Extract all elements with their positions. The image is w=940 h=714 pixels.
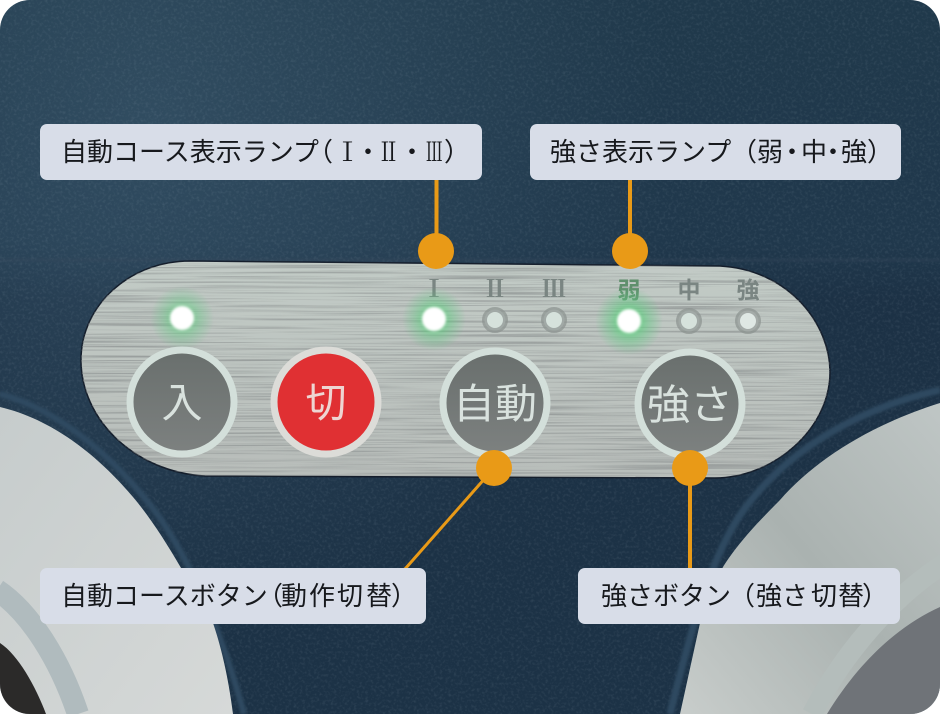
leader: course lamp <box>418 180 454 269</box>
strength lamp labels: 弱 <box>618 271 640 305</box>
strength lamp labels: 中 <box>678 271 700 305</box>
button: 切 <box>274 350 378 454</box>
strength lamp labels: 強 <box>736 271 760 305</box>
label: course button: 動作切替 <box>281 576 392 613</box>
lamp 弱 (lit) <box>598 290 660 352</box>
leader: strength button <box>672 450 708 568</box>
label: strength button: 強さ切替 <box>756 576 864 613</box>
course lamp labels: Ⅱ <box>483 277 507 303</box>
right cushion inner recess <box>827 607 940 714</box>
label: strength lamp: 強さ表示ランプ <box>550 132 731 169</box>
left cushion <box>0 394 244 714</box>
button: 強さ: 強さ <box>647 371 733 431</box>
lamp 強 (off) <box>738 310 758 332</box>
left cushion dark recess <box>0 643 46 714</box>
label: strength lamp: ・ <box>820 132 846 169</box>
label: strength lamp: 弱 <box>757 132 783 169</box>
leader: strength lamp <box>612 180 648 269</box>
right cushion <box>670 390 940 714</box>
button: 強さ <box>638 352 742 456</box>
leader: course button <box>405 450 512 569</box>
left cushion piping <box>0 590 78 714</box>
label: strength lamp <box>530 124 901 180</box>
button: 入: 入 <box>162 369 202 429</box>
button: 自動: 自動 <box>453 370 537 430</box>
label: strength lamp: 強 <box>841 132 867 169</box>
label: course lamp: ・ <box>399 132 425 169</box>
label: strength button <box>578 568 900 624</box>
course lamp labels: Ⅲ <box>542 277 566 303</box>
lamp III (off) <box>544 310 564 330</box>
strength lamp labels <box>618 278 759 300</box>
label: course lamp: Ⅲ <box>426 138 443 167</box>
course lamp labels <box>429 279 566 297</box>
label: strength lamp: ） <box>867 132 893 169</box>
label: course button: ） <box>391 576 417 613</box>
label: course lamp: ・ <box>355 132 381 169</box>
metal control plate <box>78 258 834 480</box>
label: strength button: 強さボタン <box>601 576 731 613</box>
label: course button <box>40 568 426 624</box>
course lamp labels: Ⅰ <box>422 277 446 303</box>
label: course lamp: ） <box>444 132 470 169</box>
label: course lamp <box>40 124 482 180</box>
label: strength lamp: ・ <box>779 132 805 169</box>
lamp I (lit) <box>405 290 463 348</box>
label: strength lamp: 中 <box>801 132 827 169</box>
label: strength lamp: （ <box>731 132 757 169</box>
label: course lamp: Ⅰ <box>334 138 361 167</box>
lamp II (off) <box>484 310 506 330</box>
button: 切: 切 <box>306 369 346 429</box>
right cushion piping <box>850 624 888 654</box>
label: strength button: ） <box>862 576 888 613</box>
label: course button: 自動コースボタン <box>61 576 268 613</box>
label: strength button: （ <box>729 576 755 613</box>
lamp 中 (off) <box>678 310 700 332</box>
label: course lamp: Ⅱ <box>378 138 400 167</box>
power lamp (lit) <box>154 290 210 346</box>
label: course lamp: （ <box>307 132 333 169</box>
button: 入 <box>130 350 234 454</box>
button: 自動 <box>443 351 547 455</box>
label: course lamp: 自動コース表示ランプ <box>61 132 319 169</box>
label: course button: （ <box>257 576 283 613</box>
